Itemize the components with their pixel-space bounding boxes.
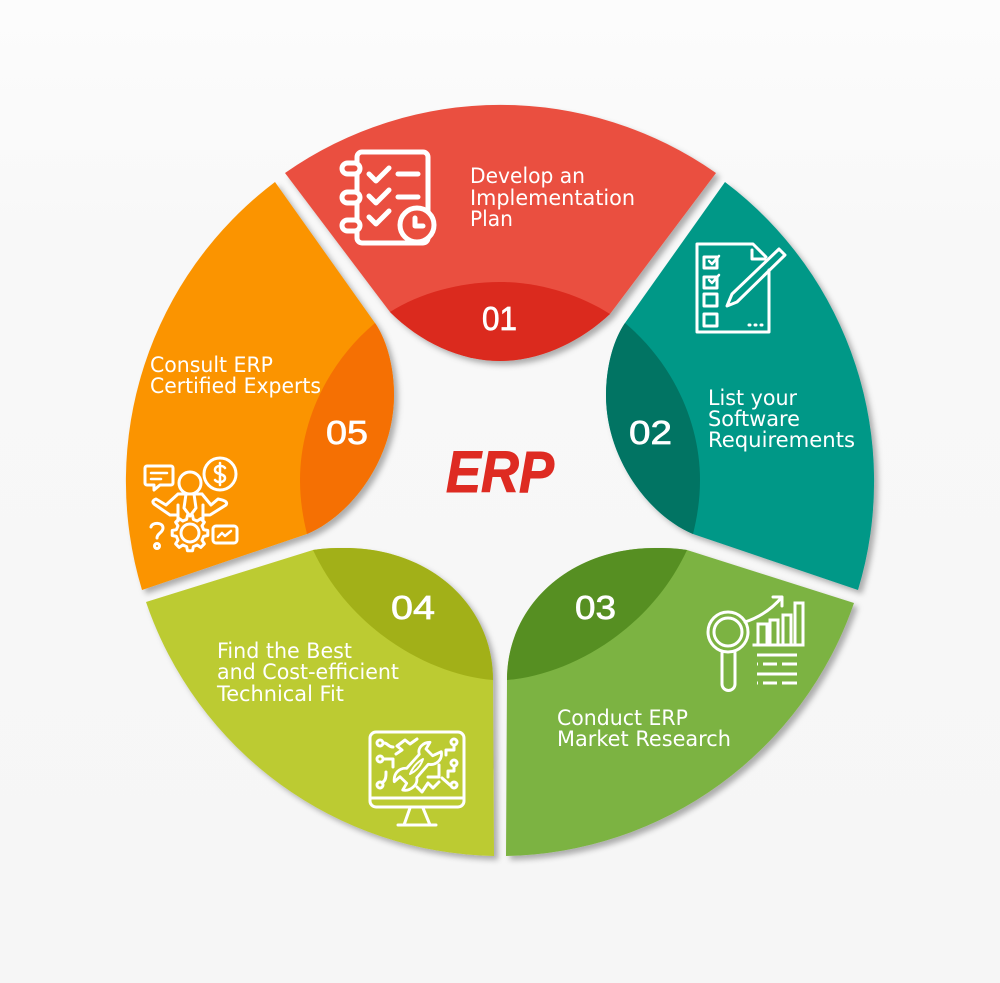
text: develop an implementation plan: Develop an xyxy=(470,164,585,188)
text: find the best and cost-efficient technical fit: Technical Fit xyxy=(216,682,344,706)
icon: consultant with gear and dollar xyxy=(145,458,237,551)
icon: document with pencil xyxy=(697,244,785,332)
panel: 03 market research xyxy=(506,548,854,856)
text: list your software requirements: Software xyxy=(708,407,800,431)
text: develop an implementation plan: Plan xyxy=(470,207,513,231)
icon: magnifier with bar chart xyxy=(708,597,803,690)
text: consult erp certified experts: Certified Experts xyxy=(150,374,321,398)
number 02: 02 xyxy=(629,414,672,451)
title: ERP: ERP xyxy=(446,440,554,505)
number 01: 01 xyxy=(482,300,517,337)
icon: checklist notebook with clock xyxy=(342,152,434,243)
text: list your software requirements: List your xyxy=(708,386,797,410)
number 03: 03 xyxy=(575,589,616,626)
panel: 05 certified experts xyxy=(126,182,394,590)
text: conduct erp market research: Conduct ERP xyxy=(557,706,688,730)
text: find the best and cost-efficient technical fit: Find the Best xyxy=(217,639,352,663)
panel: 04 technical fit xyxy=(146,548,494,856)
icon: monitor with wrench and circuits xyxy=(370,732,464,825)
panel: 01 implementation plan xyxy=(285,105,716,361)
text: conduct erp market research: Market Research xyxy=(557,727,731,751)
text: list your software requirements: Requirements xyxy=(708,428,855,452)
text: develop an implementation plan: Implementation xyxy=(470,186,635,210)
number 05: 05 xyxy=(326,414,368,451)
number 04: 04 xyxy=(391,589,435,626)
text: find the best and cost-efficient technical fit: and Cost-efficient xyxy=(217,660,399,684)
text: consult erp certified experts: Consult ERP xyxy=(150,353,273,377)
panel: 02 software requirements xyxy=(606,182,874,590)
